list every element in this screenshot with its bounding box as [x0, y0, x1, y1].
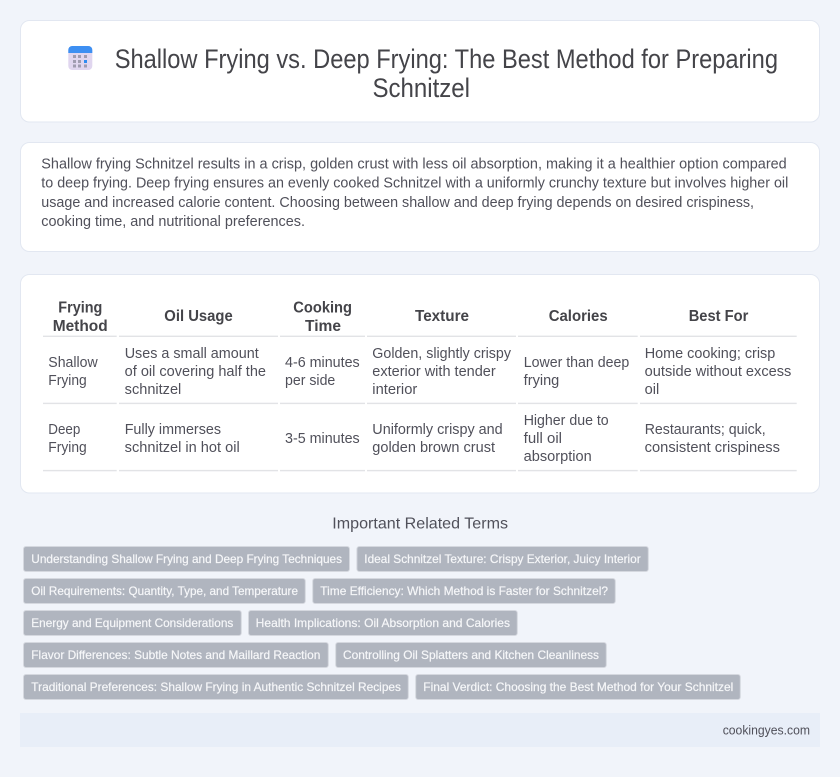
table row: deep frying: Restaurants; quick, — [645, 422, 766, 438]
tag — [24, 610, 241, 636]
table row: shallow frying: 4-6 minutes — [285, 355, 360, 371]
panel: comparison table — [20, 274, 820, 493]
table row: shallow frying: of oil covering half the — [125, 364, 266, 380]
table header row: Time — [305, 318, 341, 335]
intro text: cooking time, and nutritional preferences. — [41, 214, 305, 230]
table row: deep frying: consistent crispiness — [645, 440, 780, 456]
title: Schnitzel — [372, 73, 470, 103]
table header row: Oil Usage — [164, 308, 233, 325]
table header row: Texture — [415, 308, 469, 325]
intro text: to deep frying. Deep frying ensures an evenly cooked Schnitzel with a uniformly crunchy texture but involves higher oil — [41, 176, 788, 192]
intro text: usage and increased calorie content. Choosing between shallow and deep frying depends on desired crispiness, — [41, 195, 754, 211]
table row: shallow frying: Home cooking; crisp — [645, 346, 775, 362]
table row: deep frying: Uniformly crispy and — [372, 422, 503, 438]
table row: deep frying: Frying — [48, 440, 87, 456]
table row: shallow frying: exterior with tender — [372, 364, 496, 380]
tag — [357, 546, 648, 572]
table row: shallow frying: Golden, slightly crispy — [372, 346, 512, 362]
tag — [24, 642, 328, 668]
table header row: Calories — [549, 308, 608, 325]
table row: shallow frying: Uses a small amount — [125, 346, 259, 362]
table row: deep frying: Fully immerses — [125, 422, 221, 438]
table row: deep frying: golden brown crust — [372, 440, 495, 456]
tag: Controlling Oil Splatters and Kitchen Cleanliness — [343, 648, 599, 662]
table row: shallow frying: per side — [285, 373, 335, 389]
table row: deep frying: Deep — [48, 422, 80, 438]
intro text: Shallow frying Schnitzel results in a crisp, golden crust with less oil absorption, making it a healthier option compared — [41, 156, 787, 172]
tag — [24, 546, 350, 572]
tag — [313, 578, 615, 604]
related terms tags — [24, 546, 740, 700]
tag: Health Implications: Oil Absorption and Calories — [256, 616, 510, 630]
table row: shallow frying: frying — [524, 373, 559, 389]
title: Shallow Frying vs. Deep Frying: The Best Method for Preparing — [115, 44, 778, 74]
table row: deep frying: full oil — [524, 431, 562, 447]
panel: introduction — [20, 142, 820, 252]
table row: deep frying: schnitzel in hot oil — [125, 440, 240, 456]
icon: calendar — [68, 46, 92, 70]
tag: Traditional Preferences: Shallow Frying in Authentic Schnitzel Recipes — [31, 680, 401, 694]
tag — [24, 578, 305, 604]
table row: deep frying: Higher due to — [524, 413, 609, 429]
table header row — [53, 300, 748, 335]
tag — [416, 674, 740, 700]
panel: header — [20, 20, 820, 122]
table row: shallow frying: outside without excess — [645, 364, 791, 380]
tag: Understanding Shallow Frying and Deep Frying Techniques — [31, 552, 342, 566]
table row: shallow frying: Shallow — [48, 355, 98, 371]
heading: important related terms: Important Related Terms — [332, 516, 508, 532]
tag: Energy and Equipment Considerations — [31, 616, 233, 630]
tag: Ideal Schnitzel Texture: Crispy Exterior, Juicy Interior — [364, 552, 641, 566]
table row: shallow frying: Frying — [48, 373, 87, 389]
tag: Oil Requirements: Quantity, Type, and Temperature — [31, 584, 298, 598]
tag — [336, 642, 606, 668]
table header row: Method — [53, 318, 108, 335]
intro text — [41, 156, 788, 230]
table header row: Frying — [58, 300, 102, 316]
table row: shallow frying — [48, 346, 791, 398]
tag: Flavor Differences: Subtle Notes and Maillard Reaction — [31, 648, 320, 662]
tag — [24, 674, 408, 700]
table row: shallow frying: schnitzel — [125, 382, 181, 398]
table row: deep frying: 3-5 minutes — [285, 431, 360, 447]
footer — [20, 713, 820, 747]
table header row: Cooking — [293, 300, 352, 316]
footer source text: cookingyes.com — [723, 723, 810, 737]
title — [115, 44, 778, 103]
table row: deep frying: absorption — [524, 449, 592, 465]
table row: deep frying — [48, 413, 780, 465]
table row: shallow frying: Lower than deep — [524, 355, 629, 371]
tag: Time Efficiency: Which Method is Faster for Schnitzel? — [320, 584, 608, 598]
table header row: Best For — [689, 308, 748, 325]
tag: Final Verdict: Choosing the Best Method for Your Schnitzel — [423, 680, 733, 694]
table row: shallow frying: oil — [645, 382, 659, 398]
table row: shallow frying: interior — [372, 382, 417, 398]
tag — [248, 610, 517, 636]
